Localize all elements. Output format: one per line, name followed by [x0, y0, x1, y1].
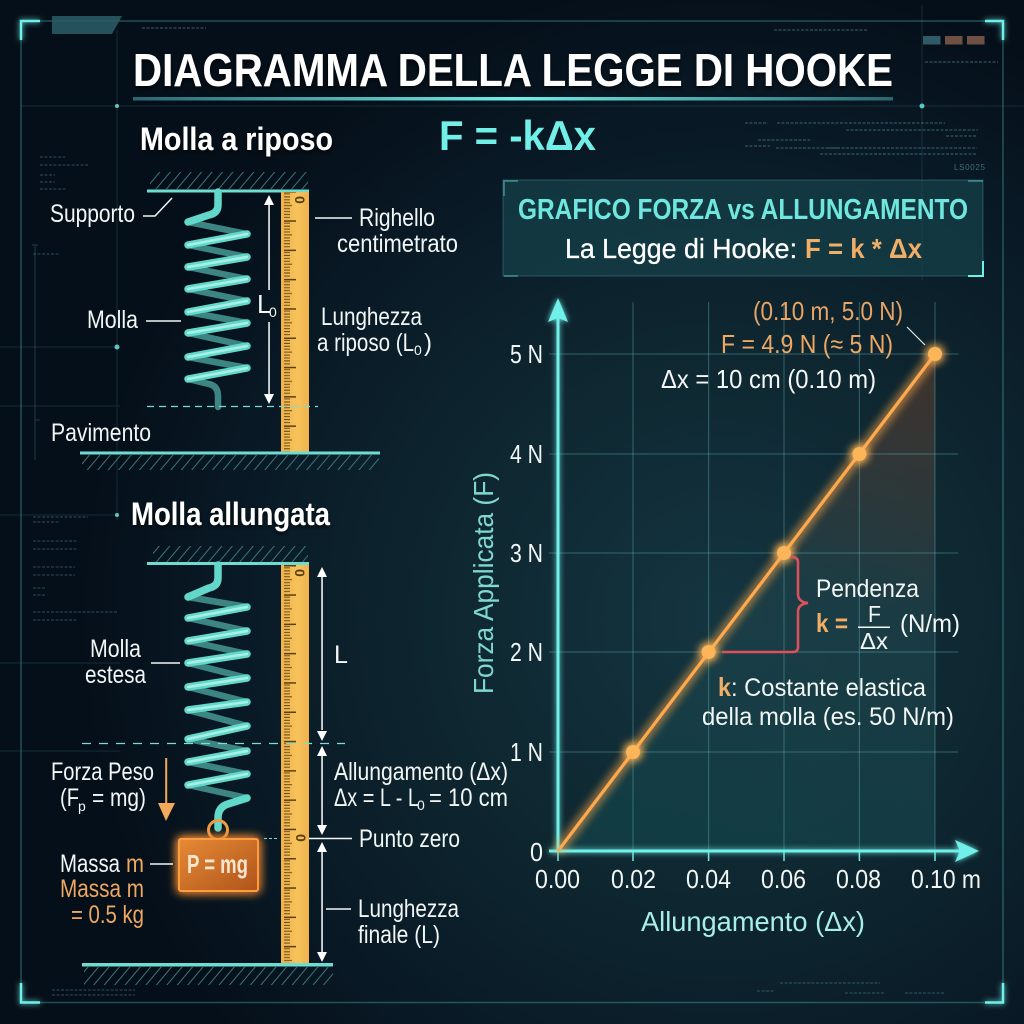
label: final length [326, 895, 459, 949]
label: rest length: Lunghezza [321, 303, 422, 331]
y axis labels: 4 N [510, 439, 543, 469]
grid [549, 302, 958, 860]
label: elongation: = 10 cm [429, 784, 508, 812]
label: rest length [317, 303, 432, 358]
axes [548, 298, 979, 862]
x axis labels [535, 864, 981, 894]
slope label: (N/m) [900, 610, 960, 638]
callout: end point: F = 4.9 N (≈ 5 N) [721, 329, 893, 359]
dimension arrows [317, 567, 327, 962]
x axis labels: 0.04 [686, 864, 731, 894]
ruler: 0 [292, 196, 308, 204]
x axis labels: 0.02 [611, 864, 656, 894]
chart area fill [558, 354, 935, 851]
L0 label: L [257, 289, 271, 319]
y axis labels [510, 339, 543, 867]
label: mass: m [126, 850, 144, 878]
force line [558, 354, 935, 851]
label: weight force [51, 758, 154, 814]
label: stretched spring [85, 635, 180, 689]
label: elongation: 0 [417, 797, 425, 813]
slope bracket [722, 557, 808, 652]
label: elongation: Δx = L - L [334, 784, 419, 812]
L0 label: 0 [269, 304, 277, 320]
spring [188, 192, 247, 407]
label: weight force: = mg) [92, 784, 146, 812]
label: elongation: Allungamento (Δx) [334, 758, 508, 786]
x axis labels: 0.06 [761, 864, 806, 894]
hook ring [208, 820, 228, 840]
spring constant label: della molla (es. 50 N/m) [702, 703, 954, 731]
label: spring: Molla [87, 306, 138, 334]
y axis labels: 5 N [510, 339, 543, 369]
hanging mass: P = mg [187, 849, 248, 879]
title: DIAGRAMMA DELLA LEGGE DI HOOKE [133, 44, 893, 96]
label: elongation [334, 758, 508, 813]
ceiling support [147, 172, 309, 192]
heading: resting spring: Molla a riposo [140, 121, 333, 157]
y axis labels: 3 N [510, 538, 543, 568]
rest length dashed line [147, 406, 318, 408]
floor [80, 452, 380, 470]
callout: end point: Δx = 10 cm (0.10 m) [661, 364, 876, 394]
chart: force vs elongation [468, 296, 981, 937]
label: stretched spring: estesa [85, 661, 146, 689]
label: spring [87, 306, 181, 334]
slope label: F [868, 601, 881, 627]
label: support: Supporto [50, 200, 135, 228]
data points [626, 347, 942, 759]
y axis title: Forza Applicata (F) [468, 472, 499, 694]
floor [82, 963, 333, 985]
x axis ticks [558, 851, 935, 861]
graph formula: F = k * Δx [805, 233, 922, 264]
formula: F = -kΔx [439, 112, 597, 159]
ruler [281, 565, 309, 963]
label: ruler: centimetrato [337, 230, 458, 258]
icon: top left tab [52, 16, 122, 34]
graph subtitle: La Legge di Hooke: [565, 233, 797, 264]
x axis labels: 0.00 [535, 864, 580, 894]
slope label: k = [816, 608, 848, 638]
callout: end point: (0.10 m, 5.0 N) [753, 296, 903, 326]
panel: stretched spring [51, 546, 508, 985]
label: mass: = 0.5 kg [71, 901, 144, 929]
heading: stretched spring: Molla allungata [131, 496, 330, 532]
label: L: L [334, 641, 348, 669]
y axis labels: 0 [530, 837, 543, 867]
x axis labels: 0.08 [836, 864, 881, 894]
arrow: weight force [158, 758, 175, 821]
spring [188, 565, 247, 828]
spring constant label: k [718, 672, 731, 702]
ruler: 0 [293, 834, 309, 842]
panel: resting spring [50, 172, 458, 470]
spring constant label [702, 672, 954, 731]
label: final length: finale (L) [358, 921, 440, 949]
label: final length: Lunghezza [358, 895, 459, 923]
label: rest length: ) [424, 329, 432, 357]
label: ruler [315, 204, 458, 258]
ruler [281, 192, 309, 452]
label: stretched spring: Molla [90, 635, 141, 663]
label: weight force: (F [60, 784, 79, 812]
label: mass [60, 850, 173, 929]
label: floor: Pavimento [51, 419, 151, 447]
title underline [133, 97, 893, 100]
label: rest length: 0 [414, 342, 422, 358]
stretched length dashed line [82, 742, 345, 744]
code label: LS0025 [954, 163, 986, 172]
x axis labels: 0.10 m [911, 864, 981, 894]
label: rest length: a riposo (L [317, 329, 414, 357]
y axis labels: 1 N [510, 737, 543, 767]
y axis labels: 2 N [510, 637, 543, 667]
slope label: Δx [860, 628, 889, 654]
status swatches [923, 36, 984, 44]
ruler: 0 [292, 569, 308, 577]
slope label [816, 575, 960, 654]
ceiling support [147, 546, 309, 565]
label: zero point: Punto zero [359, 825, 460, 853]
label: mass: Massa m [60, 875, 144, 903]
x axis title: Allungamento (Δx) [641, 906, 865, 937]
label: weight force: Forza Peso [51, 758, 154, 786]
panel: graph title [503, 180, 983, 276]
label: mass: Massa [60, 850, 120, 878]
callout: end point [661, 296, 925, 394]
label: weight force: p [78, 798, 86, 814]
spring constant label: : Costante elastica [731, 674, 926, 702]
slope label: Pendenza [816, 575, 919, 603]
label: ruler: Righello [359, 204, 435, 232]
hanging mass [179, 839, 258, 891]
L0 dimension arrow [264, 195, 274, 404]
